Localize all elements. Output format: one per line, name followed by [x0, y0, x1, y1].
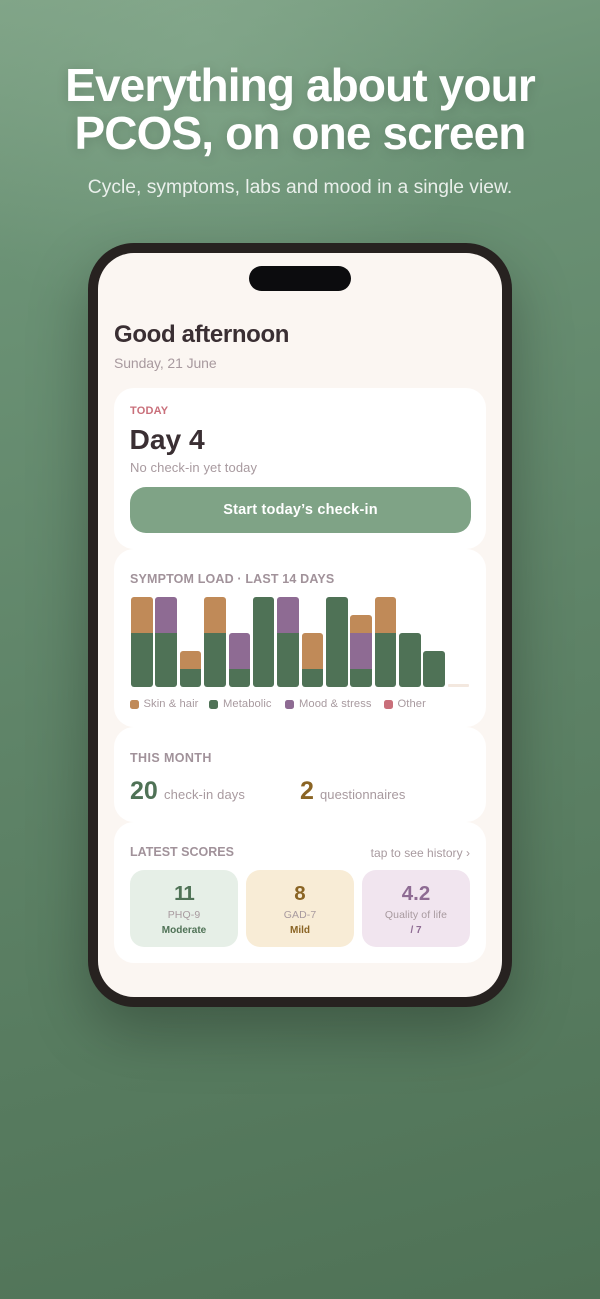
score tile: PHQ-9: [130, 870, 238, 947]
this month heading: THIS MONTH: [130, 751, 212, 765]
symptom load heading: SYMPTOM LOAD · LAST 14 DAYS: [130, 572, 334, 586]
greeting heading: Good afternoon: [114, 321, 289, 348]
title: [65, 59, 536, 159]
questionnaires stat: 2: [300, 777, 314, 805]
legend: Metabolic: [223, 698, 272, 710]
title: PCOS, on one screen: [74, 107, 526, 159]
score tile: quality of life: [362, 870, 470, 947]
legend: Skin & hair: [144, 698, 198, 710]
panel: latest scores: [114, 822, 486, 963]
check-in days stat: check-in days: [164, 787, 245, 802]
check-in days stat: [130, 777, 245, 805]
score tile: quality of life: Quality of life: [385, 909, 447, 921]
legend: Other: [398, 698, 426, 710]
score tile: GAD-7: Mild: [290, 925, 310, 936]
title: Everything about your: [65, 59, 535, 111]
phone: [88, 243, 512, 1007]
background glow: [0, 0, 600, 400]
subtitle: Cycle, symptoms, labs and mood in a single view.: [88, 177, 512, 198]
score tile: PHQ-9: Moderate: [162, 925, 206, 936]
score tile: PHQ-9: PHQ-9: [168, 909, 200, 921]
score tile: GAD-7: GAD-7: [284, 909, 316, 921]
panel: today: [114, 388, 486, 549]
questionnaires stat: [300, 777, 405, 805]
phone screen: [98, 253, 502, 997]
legend: Mood & stress: [299, 698, 372, 710]
check-in button: Start today’s check-in: [223, 502, 378, 518]
score tile: GAD-7: [246, 870, 354, 947]
legend: [130, 698, 426, 710]
dynamic island: [249, 266, 351, 291]
check-in status: No check-in yet today: [130, 460, 257, 475]
bar chart: [131, 597, 469, 687]
panel: this month: [114, 727, 486, 822]
history link: tap to see history ›: [371, 846, 470, 860]
today label: TODAY: [130, 405, 168, 417]
questionnaires stat: questionnaires: [320, 787, 405, 802]
score tile: GAD-7: 8: [294, 882, 306, 905]
panel: symptom load: [114, 549, 486, 727]
check-in days stat: 20: [130, 777, 158, 805]
latest scores heading: LATEST SCORES: [130, 845, 234, 859]
score tile: quality of life: / 7: [410, 925, 422, 936]
check-in button: [130, 487, 471, 533]
score tile: quality of life: 4.2: [402, 882, 430, 905]
day number: Day 4: [130, 423, 205, 455]
date: Sunday, 21 June: [114, 355, 217, 371]
score tile: PHQ-9: 11: [174, 882, 194, 905]
